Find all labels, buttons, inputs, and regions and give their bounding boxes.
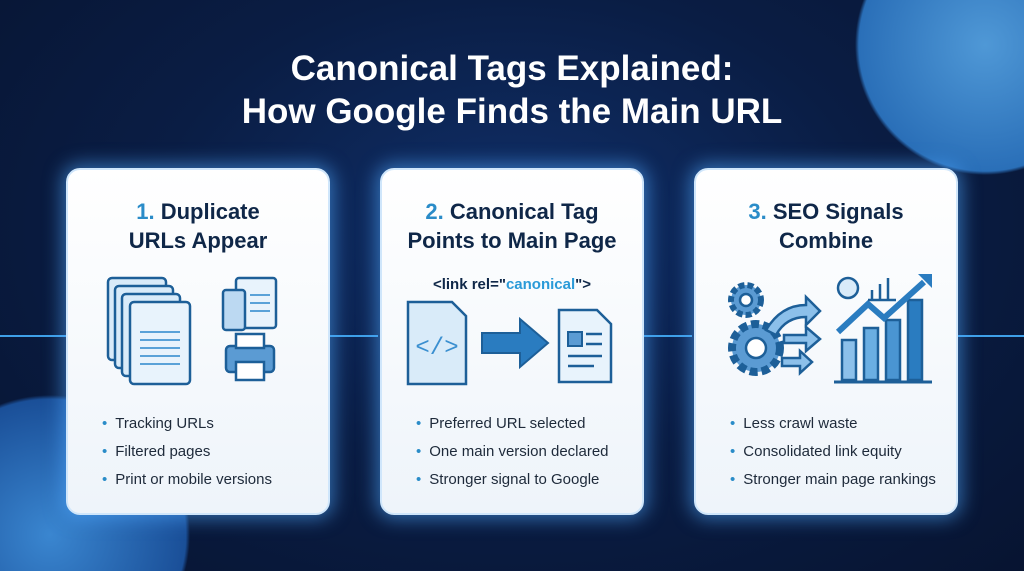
icon: code page arrow to main page: </>: [415, 335, 459, 362]
panel: duplicate URLs: [66, 168, 330, 515]
bullets: [102, 415, 272, 488]
title: Canonical Tags Explained:: [291, 49, 733, 88]
heading: 3. SEO Signals: [748, 199, 904, 224]
title: [242, 49, 782, 131]
bullets: Preferred URL selected: [429, 415, 585, 432]
bullets: Stronger signal to Google: [429, 471, 599, 488]
icon: code page arrow to main page: [406, 300, 612, 386]
icon: documents, phone, printer: [106, 276, 278, 386]
bullets: Stronger main page rankings: [743, 471, 936, 488]
panel: canonical tag: [380, 168, 644, 515]
arrow: right connector: [958, 335, 1024, 337]
arrow: card2 to card3: [644, 335, 692, 337]
heading: 1. Duplicate: [136, 199, 260, 224]
bullets: Less crawl waste: [743, 415, 857, 432]
arrow: card1 to card2: [330, 335, 378, 337]
heading: [407, 199, 617, 253]
bullets: Consolidated link equity: [743, 443, 902, 460]
title: How Google Finds the Main URL: [242, 92, 782, 131]
bullets: Tracking URLs: [115, 415, 214, 432]
icon: gears and growth chart: [728, 274, 932, 384]
bullets: One main version declared: [429, 443, 609, 460]
bullets: [730, 415, 936, 488]
panel: SEO signals: [694, 168, 958, 515]
heading: Combine: [779, 228, 873, 253]
bullets: Filtered pages: [115, 443, 210, 460]
heading: URLs Appear: [129, 228, 267, 253]
bullets: [416, 415, 609, 488]
code snippet: <link rel="canonical">: [433, 276, 591, 293]
heading: [129, 199, 267, 253]
arrow: left connector: [0, 335, 66, 337]
heading: Points to Main Page: [407, 228, 617, 253]
heading: [748, 199, 904, 253]
bullets: Print or mobile versions: [115, 471, 272, 488]
heading: 2. Canonical Tag: [425, 199, 599, 224]
